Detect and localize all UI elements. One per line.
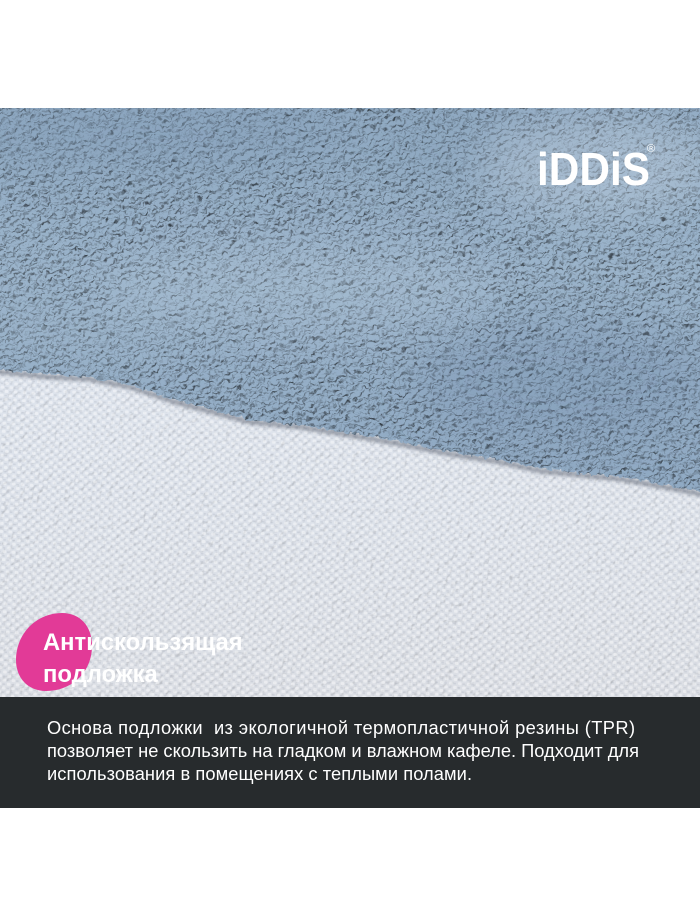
backing fabric [0, 340, 700, 697]
caption text: использования в помещениях с теплыми полами. [47, 763, 472, 784]
rug pile [0, 80, 700, 505]
rug shadow edge [0, 371, 700, 496]
heading: anti-slip backing: подложка [43, 661, 158, 688]
heading: anti-slip backing [43, 629, 243, 688]
dark caption band [0, 697, 700, 808]
caption text [47, 717, 639, 784]
pink blob behind heading [16, 613, 92, 691]
registered mark: ® [647, 143, 655, 155]
caption text: Основа подложки из экологичной термопластичной резины (TPR) [47, 717, 635, 738]
caption text: позволяет не скользить на гладком и влажном кафеле. Подходит для [47, 740, 639, 761]
heading: anti-slip backing: Антискользящая [43, 629, 243, 656]
product photo: rug and backing [0, 108, 700, 808]
brand logo: iDDiS: iDDiS [537, 143, 650, 195]
